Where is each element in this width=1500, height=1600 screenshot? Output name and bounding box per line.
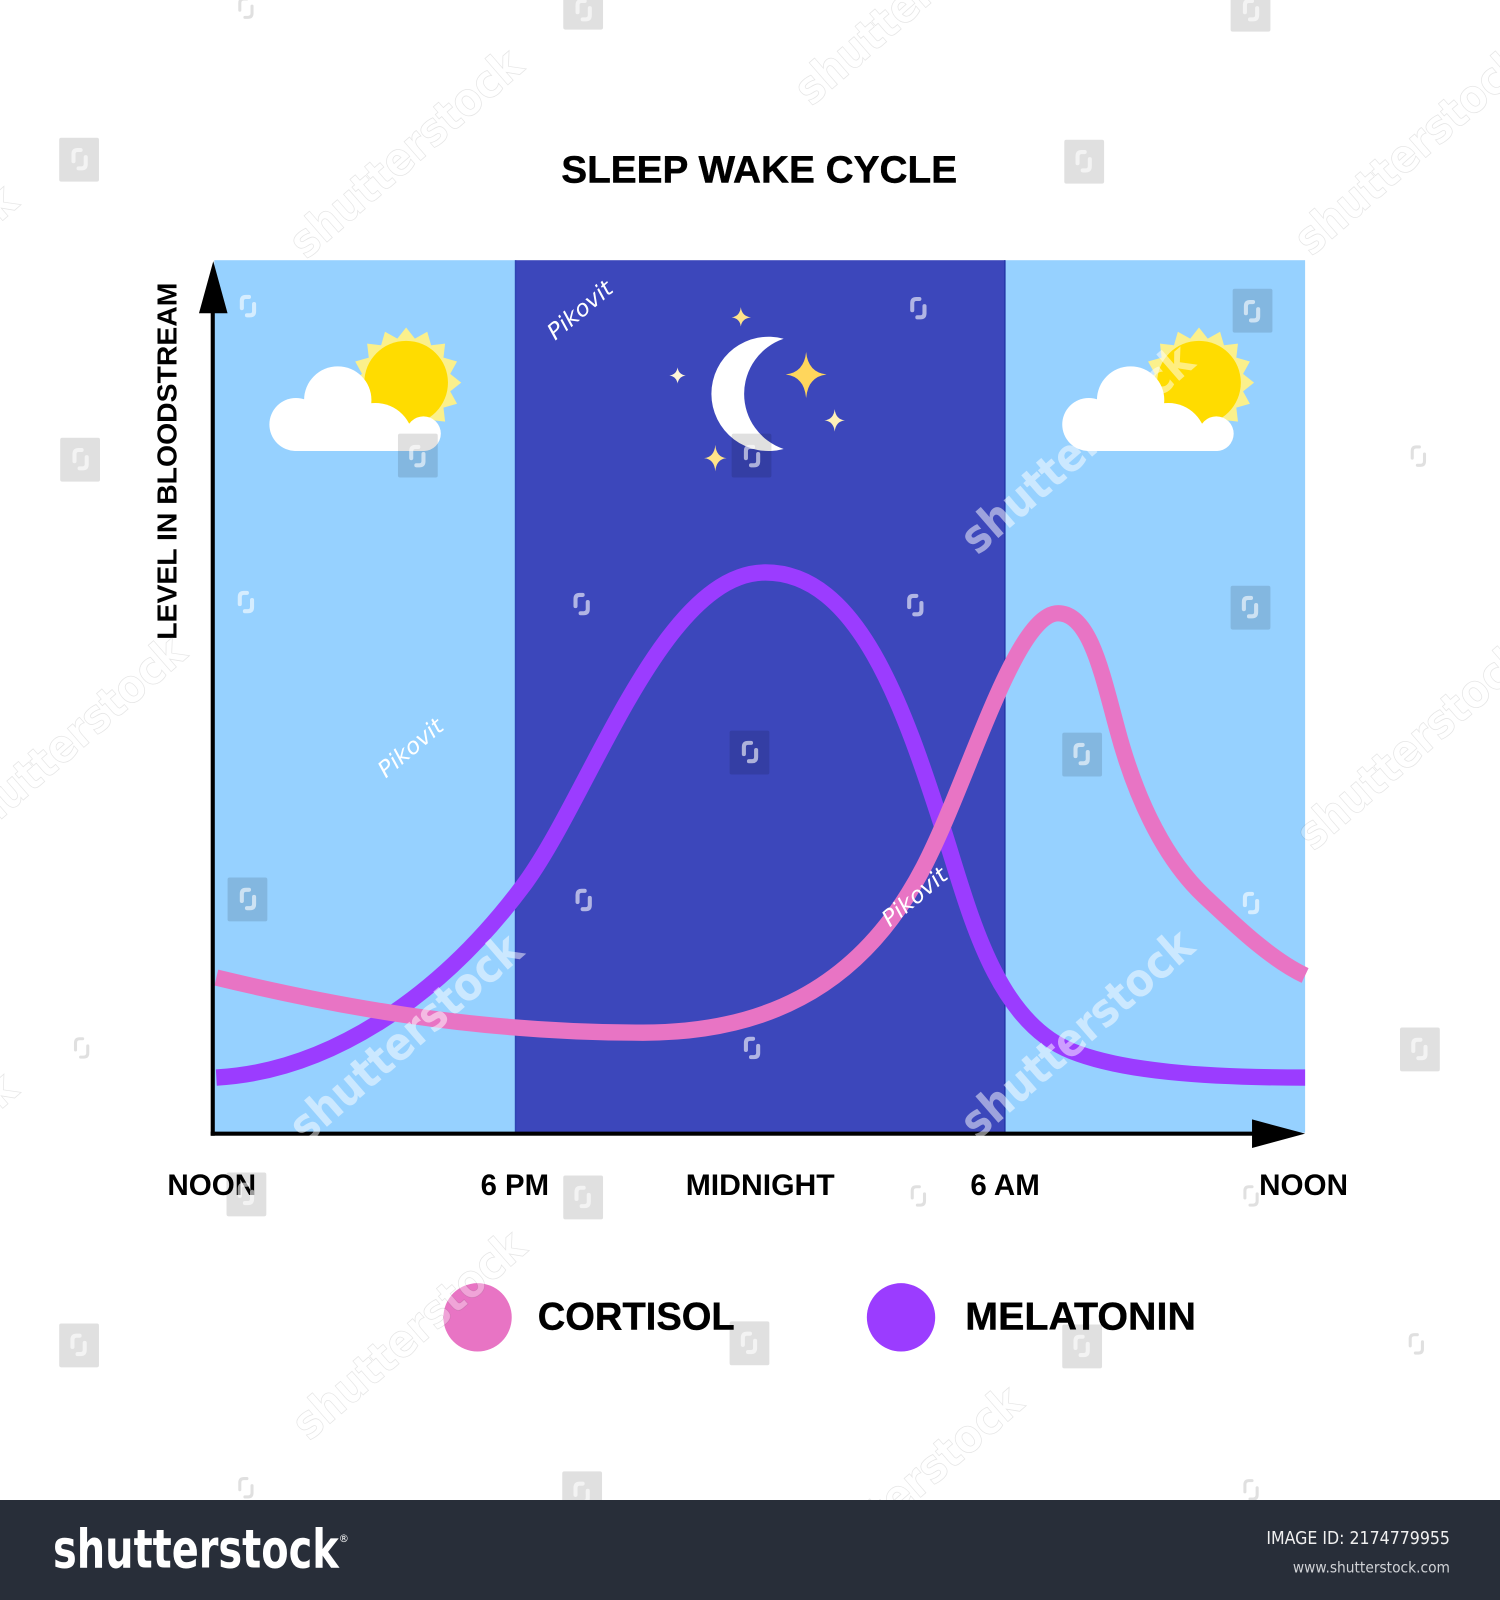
icon: sun and cloud right	[1062, 328, 1254, 451]
icon: sun and cloud left	[269, 328, 462, 451]
watermark: contributor name: Pikovit	[373, 713, 450, 783]
watermark: shutterstock diagonal text: shutterstock	[278, 36, 534, 269]
panel: daytime morning	[1005, 260, 1305, 1133]
watermark: shutterstock diagonal text: shutterstock	[778, 1373, 1034, 1600]
y axis arrow	[199, 261, 228, 1136]
watermark: contributor name: Pikovit	[877, 862, 954, 932]
x axis arrow	[211, 1119, 1305, 1148]
line: melatonin curve	[216, 572, 1305, 1078]
footer: website: www.shutterstock.com	[1293, 1558, 1450, 1576]
panel: night	[515, 260, 1005, 1133]
legend: cortisol: CORTISOL	[538, 1296, 735, 1339]
watermark: contributor name: Pikovit	[542, 275, 619, 345]
footer: shutterstock logo: ®	[339, 1534, 349, 1545]
panel: daytime afternoon	[214, 260, 515, 1133]
x axis labels	[167, 1169, 1348, 1202]
watermark: shutterstock diagonal text: shutterstock	[949, 332, 1205, 564]
y axis label: LEVEL IN BLOODSTREAM	[152, 283, 183, 640]
title: SLEEP WAKE CYCLE	[561, 149, 957, 191]
watermark: shutterstock diagonal text: shutterstock	[278, 921, 534, 1153]
watermark: shutterstock diagonal text: shutterstock	[949, 917, 1205, 1149]
x axis labels: MIDNIGHT	[686, 1169, 835, 1202]
legend: melatonin	[867, 1283, 1196, 1352]
x axis labels: 6 PM	[481, 1169, 549, 1202]
footer: shutterstock logo: shutterstock	[53, 1518, 340, 1580]
x axis labels: 6 AM	[970, 1169, 1040, 1202]
watermark: shutterstock diagonal text: shutterstock	[281, 1218, 537, 1450]
legend: melatonin: MELATONIN	[965, 1296, 1196, 1339]
x axis labels: NOON	[167, 1169, 256, 1202]
footer: image id: IMAGE ID: 2174779955	[1266, 1529, 1450, 1549]
footer bar	[0, 1500, 1500, 1600]
icon: moon and stars	[669, 307, 845, 471]
x axis labels: NOON	[1259, 1169, 1348, 1202]
panel: chart background	[214, 260, 1305, 1133]
watermark: contributor name	[373, 275, 954, 932]
line: cortisol curve	[216, 613, 1305, 1033]
legend: cortisol	[443, 1283, 735, 1352]
